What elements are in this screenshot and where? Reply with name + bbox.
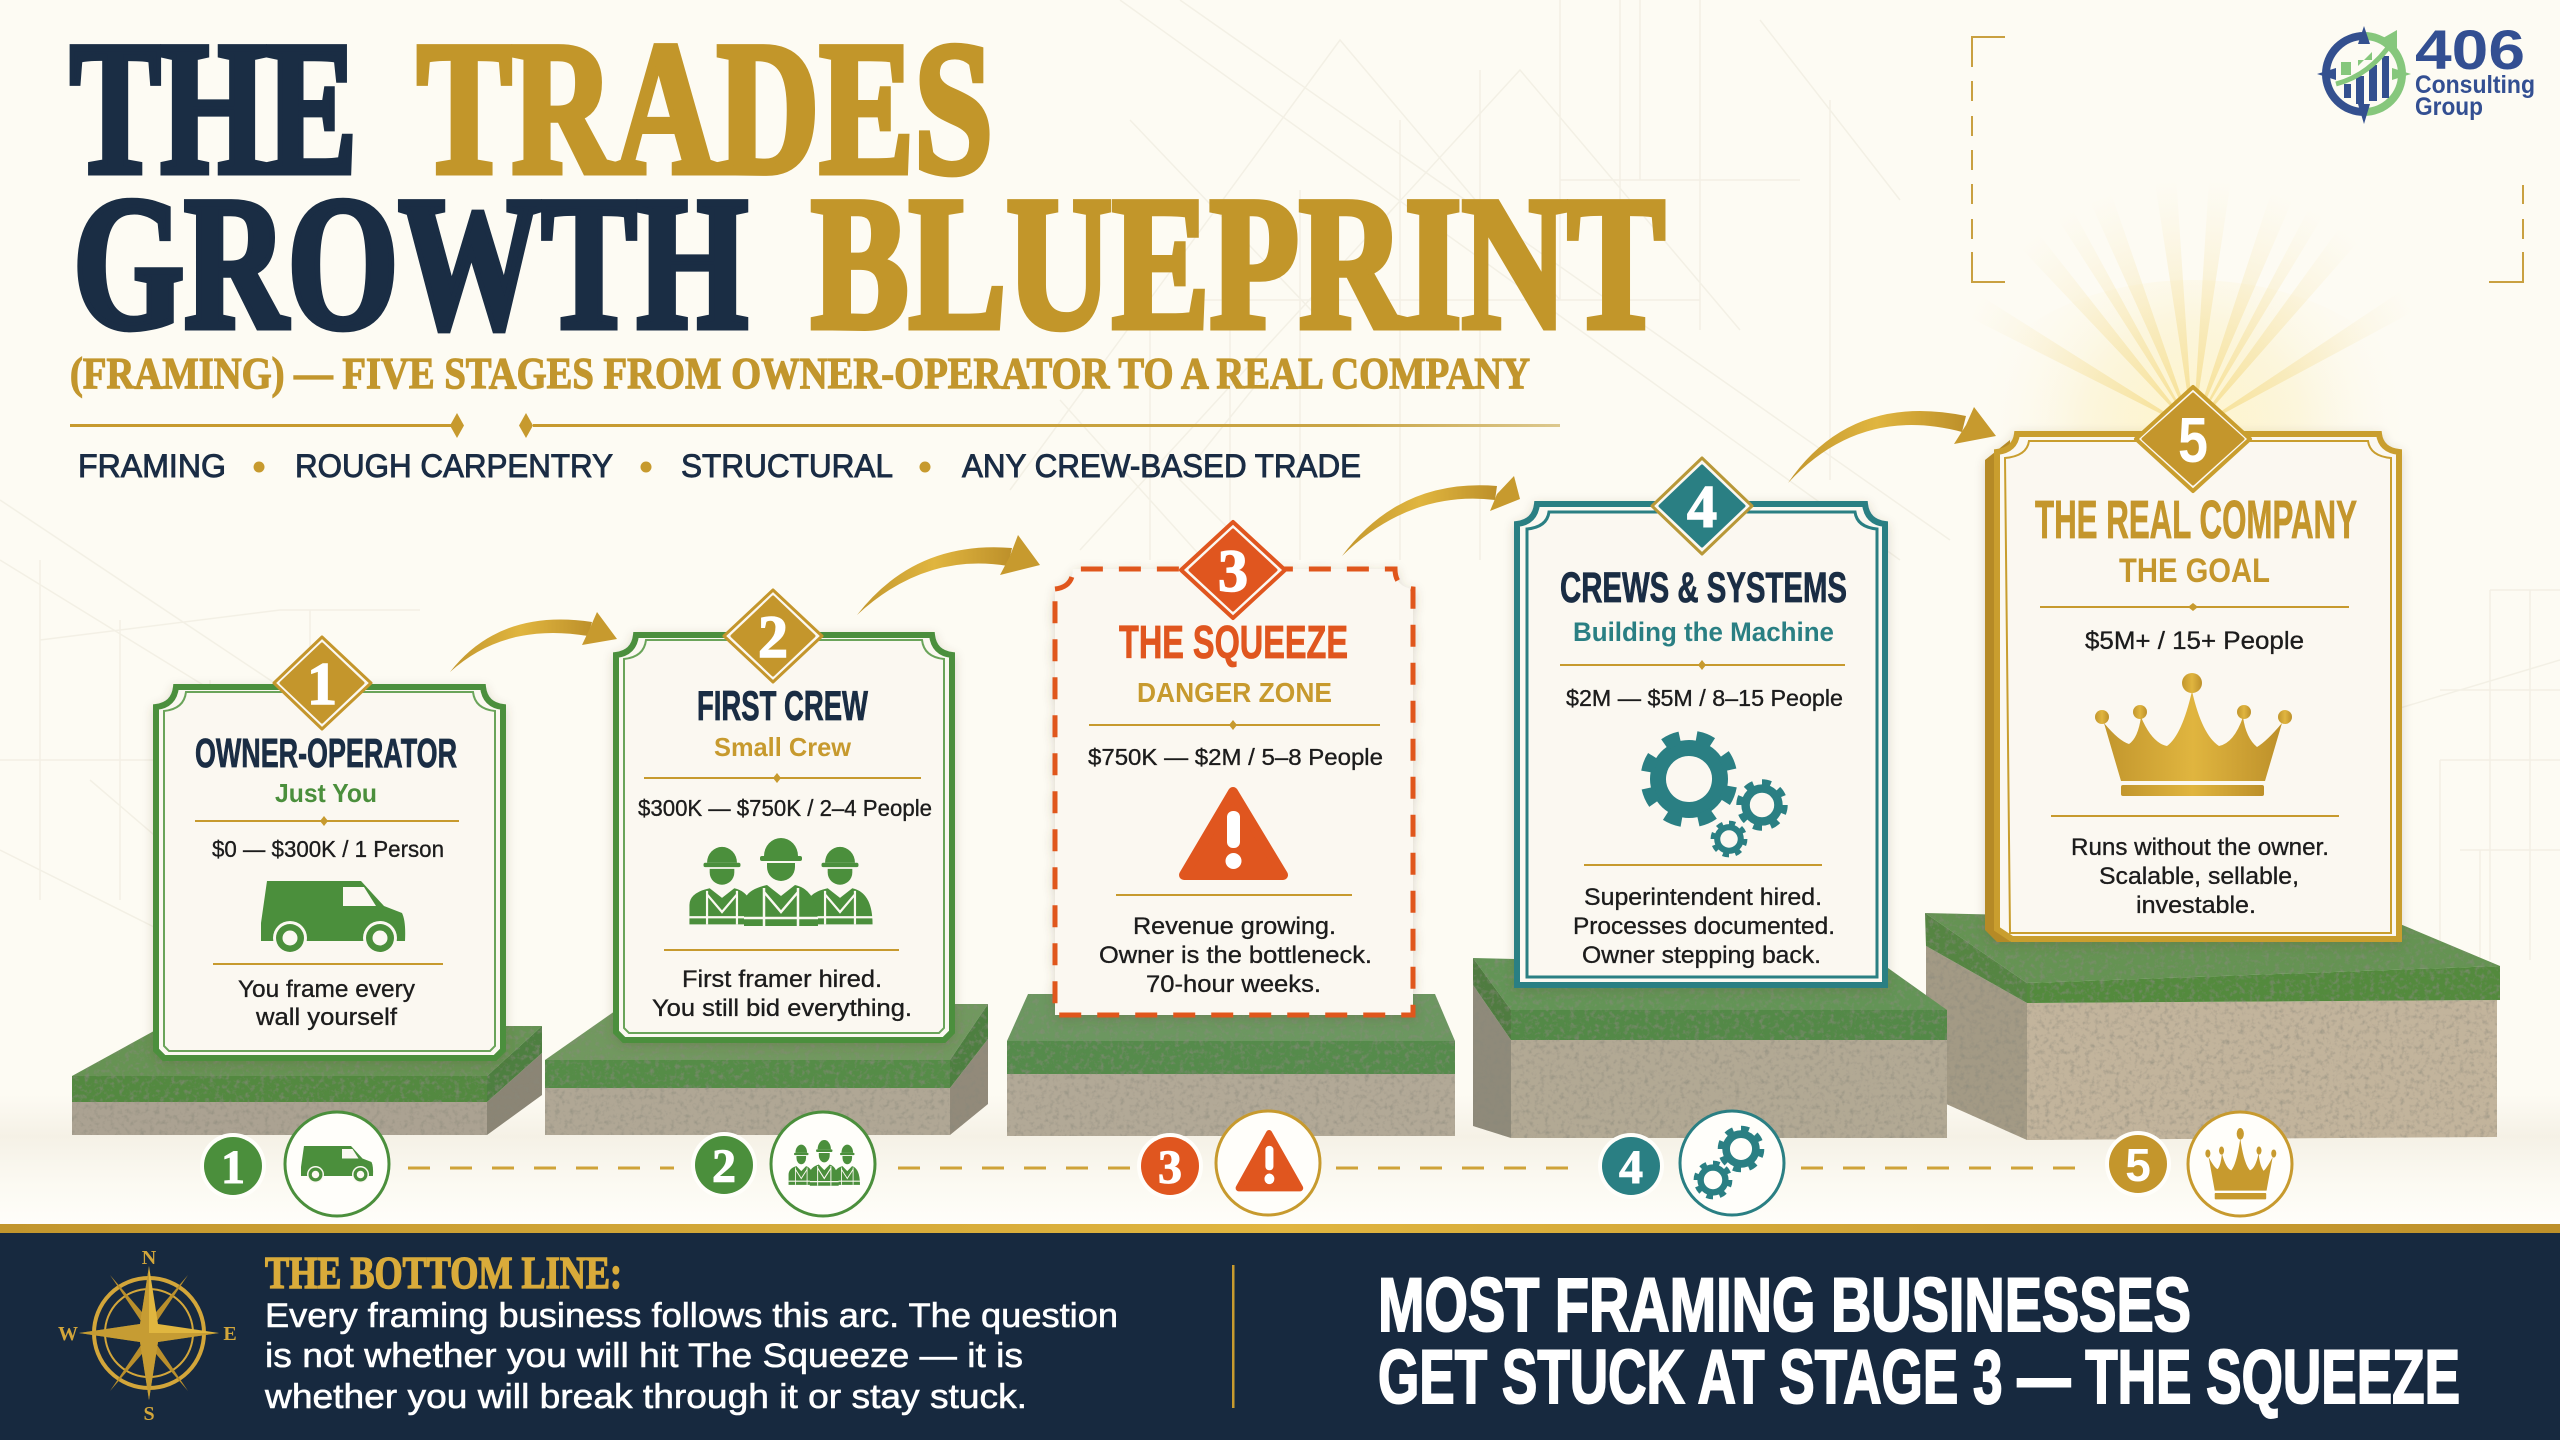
stage tag: DANGER ZONE: [1137, 677, 1332, 708]
step 5 number: [2105, 1131, 2171, 1197]
title line 1: [70, 4, 993, 214]
badge 3: 3: [1218, 538, 1248, 604]
step 1 number: [200, 1133, 266, 1199]
description: [1573, 884, 1835, 969]
bottom line body: is not whether you will hit The Squeeze — it is: [265, 1337, 1023, 1375]
badge 5: 5: [2178, 404, 2208, 476]
icon: compass rose: E: [223, 1323, 237, 1345]
step 4 number: [1598, 1133, 1664, 1199]
description: [652, 966, 912, 1022]
icon: compass rose: S: [143, 1403, 155, 1425]
revenue and headcount: $2M — $5M / 8–15 People: [1566, 685, 1843, 711]
stage name: FIRST CREW: [697, 682, 868, 729]
title line 1: THE: [70, 4, 357, 214]
badge 4: [1652, 458, 1752, 554]
faint blueprint sketch: [0, 0, 2560, 1000]
stage 1 card: owner-operator: [156, 637, 503, 1058]
arrow 2 to 3: [857, 535, 1040, 615]
step 1 number: 1: [221, 1141, 245, 1194]
stage name: THE SQUEEZE: [1119, 616, 1348, 668]
sunburst: [1915, 85, 2472, 580]
arrow 4 to 5: [1788, 407, 1996, 483]
step 5 icon: [2188, 1112, 2292, 1216]
subtitle: (FRAMING) — FIVE STAGES FROM OWNER-OPERATOR TO A REAL COMPANY: [70, 349, 1530, 398]
trade categories: ROUGH CARPENTRY: [295, 448, 613, 484]
icon: crown: [2095, 673, 2292, 796]
badge 3: [1181, 522, 1285, 618]
card frame: [616, 635, 952, 1040]
divider: [2040, 603, 2349, 611]
stage name: OWNER-OPERATOR: [195, 730, 457, 776]
description: wall yourself: [255, 1004, 397, 1031]
bottom line body: whether you will break through it or stay stuck.: [264, 1378, 1027, 1416]
title line 2: BLUEPRINT: [811, 159, 1665, 369]
corner brackets: [1972, 37, 2523, 282]
icon: compass rose: [58, 1247, 237, 1425]
floor: [0, 1095, 2560, 1225]
step 3 number: 3: [1158, 1141, 1182, 1194]
trade categories: ANY CREW-BASED TRADE: [962, 448, 1361, 484]
badge 4: 4: [1687, 474, 1717, 540]
stage tag: Building the Machine: [1573, 617, 1834, 647]
pedestal 1: [72, 1026, 542, 1135]
logo wordmark: Consulting: [2415, 71, 2535, 99]
title line 2: GROWTH: [73, 159, 748, 369]
lower divider: [664, 949, 899, 951]
pedestal 2: [545, 1004, 988, 1135]
navy bar: [0, 1233, 2560, 1440]
description: [238, 976, 415, 1031]
divider: [1560, 660, 1845, 670]
card frame: [1517, 504, 1885, 985]
stage 3 card: the squeeze: [1055, 522, 1413, 1015]
step 4 icon: [1680, 1111, 1784, 1215]
dashed connectors: [408, 1166, 2090, 1170]
logo wordmark: 406: [2415, 18, 2525, 81]
divider: [195, 816, 459, 826]
icon: gears: [1640, 730, 1784, 855]
description: 70-hour weeks.: [1146, 971, 1321, 998]
card frame: [1985, 434, 2399, 942]
revenue and headcount: $0 — $300K / 1 Person: [212, 836, 444, 862]
stage tag: Small Crew: [714, 732, 852, 762]
arrow 3 to 4: [1342, 476, 1520, 556]
ornament divider: [70, 413, 1560, 438]
description: Revenue growing.: [1133, 913, 1336, 940]
icon: van: [261, 881, 405, 955]
stage 5 card: the real company: [1985, 387, 2399, 942]
bottom banner: [0, 1224, 2560, 1440]
divider: [644, 773, 921, 783]
logo wordmark: Group: [2415, 93, 2483, 121]
lower divider: [213, 963, 443, 965]
title: [70, 4, 1665, 369]
description: Processes documented.: [1573, 913, 1835, 940]
pedestal 4: [1473, 958, 1947, 1138]
description: Runs without the owner.: [2071, 834, 2329, 861]
step 3 icon: [1216, 1111, 1320, 1215]
stage 2 card: first crew: [616, 590, 952, 1040]
divider: [1089, 720, 1380, 730]
badge 5: [2136, 387, 2250, 491]
step 3 number: [1137, 1133, 1203, 1199]
title line 2: [73, 159, 1665, 369]
description: You frame every: [238, 976, 415, 1003]
step 1 icon: [285, 1112, 389, 1216]
badge 1: [274, 637, 371, 729]
trade categories: [78, 448, 1361, 484]
description: [1099, 913, 1372, 998]
description: You still bid everything.: [652, 995, 912, 1022]
revenue and headcount: $750K — $2M / 5–8 People: [1088, 744, 1383, 770]
arrow 1 to 2: [450, 612, 617, 672]
icon: compass rose: N: [142, 1247, 157, 1269]
icon: crew: [689, 838, 873, 926]
bottom line body: Every framing business follows this arc. The question: [265, 1297, 1118, 1335]
step 2 icon: [771, 1112, 875, 1216]
stage 4 card: crews and systems: [1517, 458, 1885, 985]
description: Owner stepping back.: [1582, 942, 1821, 969]
vertical divider: [1232, 1265, 1234, 1408]
revenue and headcount: $5M+ / 15+ People: [2085, 627, 2304, 655]
lower divider: [1584, 864, 1822, 866]
callout: MOST FRAMING BUSINESSES: [1378, 1263, 2191, 1348]
trade categories: FRAMING: [78, 448, 226, 484]
trade categories: STRUCTURAL: [681, 448, 893, 484]
logo: [2317, 18, 2535, 124]
card frame: [1055, 569, 1413, 1015]
gold stripe: [0, 1224, 2560, 1233]
lower divider: [2051, 815, 2339, 817]
bottom line heading: THE BOTTOM LINE:: [265, 1247, 622, 1298]
description: [2071, 834, 2329, 919]
badge 2: 2: [758, 604, 788, 670]
description: Scalable, sellable,: [2099, 863, 2299, 890]
stage tag: THE GOAL: [2119, 552, 2270, 590]
step 2 number: 2: [712, 1140, 736, 1193]
stage tag: Just You: [275, 778, 377, 808]
step 5 number: 5: [2125, 1139, 2151, 1191]
bottom line body: [264, 1297, 1118, 1416]
icon: compass rose: W: [58, 1323, 78, 1345]
pedestal 3: [1007, 994, 1455, 1136]
callout: [1378, 1263, 2460, 1420]
pedestal 5: [1925, 913, 2500, 1140]
description: First framer hired.: [682, 966, 882, 993]
revenue and headcount: $300K — $750K / 2–4 People: [638, 795, 932, 821]
progress timeline: [200, 1111, 2292, 1216]
step 4 number: 4: [1619, 1141, 1643, 1194]
stage name: CREWS & SYSTEMS: [1560, 564, 1847, 612]
title line 1: TRADES: [417, 4, 993, 214]
badge 1: 1: [307, 651, 337, 717]
step 2 number: [691, 1132, 757, 1198]
description: Owner is the bottleneck.: [1099, 942, 1372, 969]
lower divider: [1116, 894, 1352, 896]
description: Superintendent hired.: [1584, 884, 1822, 911]
logo compass mark: [2317, 26, 2411, 124]
icon: warning: [1184, 792, 1283, 875]
logo wordmark: [2415, 18, 2535, 121]
description: investable.: [2136, 892, 2256, 919]
badge 2: [724, 590, 822, 682]
card frame: [156, 687, 503, 1058]
